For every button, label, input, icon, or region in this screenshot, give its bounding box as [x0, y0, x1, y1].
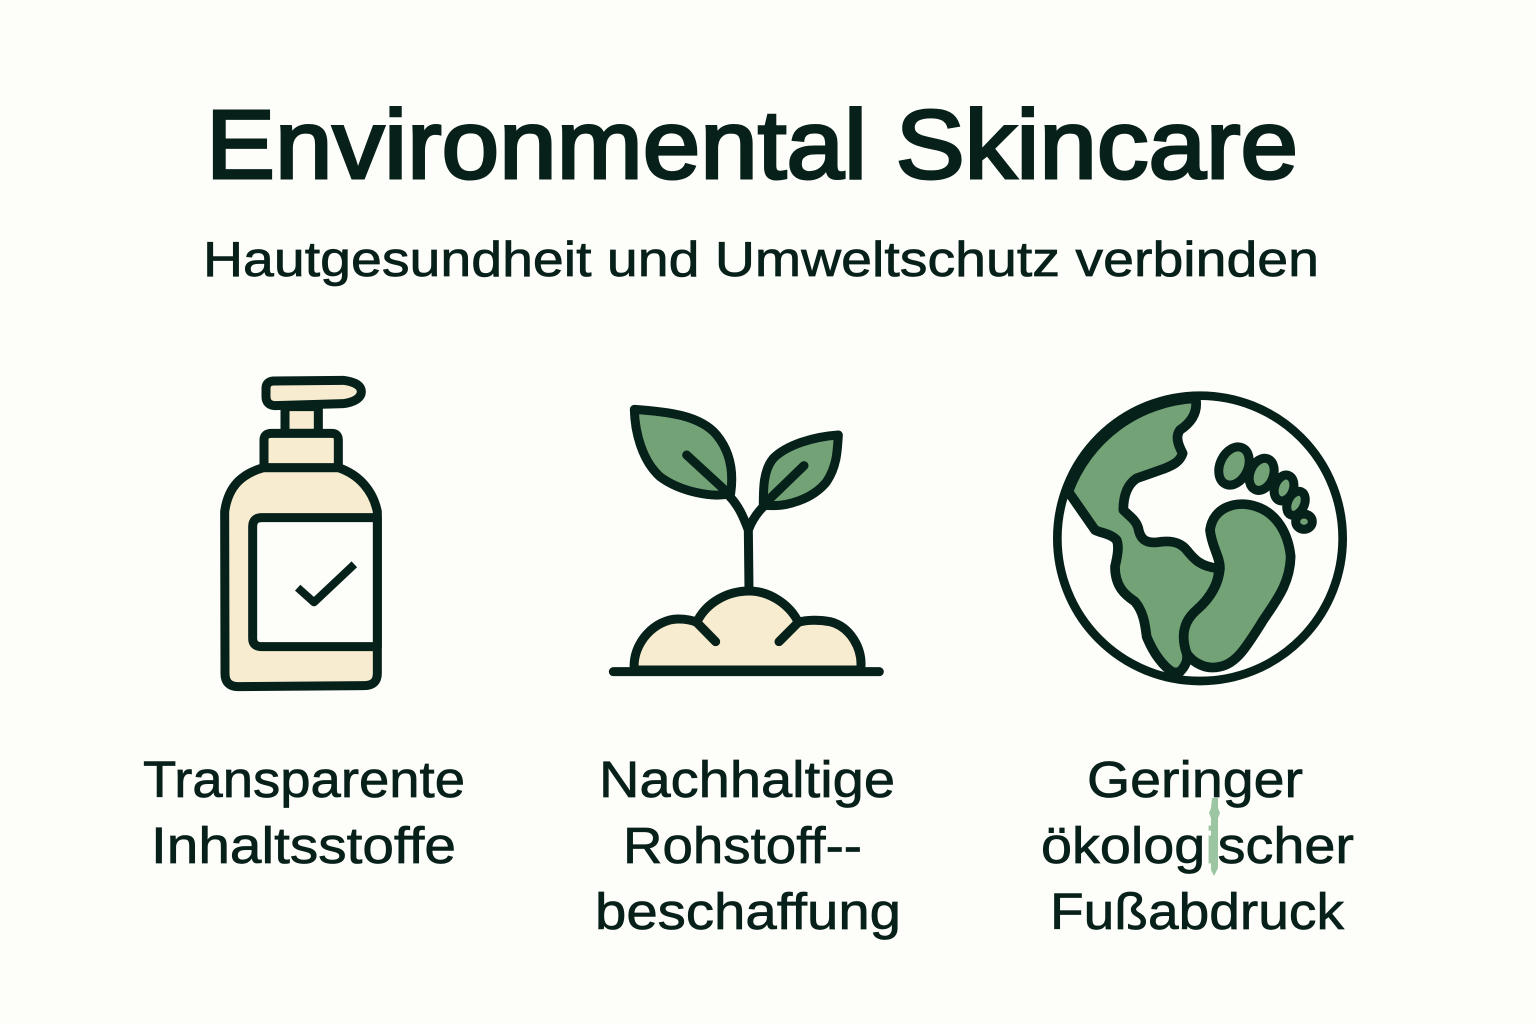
- title: Environmental Skincare: [206, 90, 1298, 199]
- icon: pump bottle with checkmark: [225, 380, 377, 687]
- label: transparent ingredients: Transparente: [143, 751, 465, 808]
- label: low ecological footprint: ökolog ischer: [1041, 817, 1354, 874]
- icon: globe with footprint: [1057, 396, 1343, 681]
- green vertical stroke over text: [1209, 798, 1220, 876]
- label: low ecological footprint: Fußabdruck: [1050, 883, 1345, 940]
- label: low ecological footprint: Geringer: [1087, 751, 1303, 808]
- subtitle: Hautgesundheit und Umweltschutz verbinden: [203, 233, 1319, 287]
- label: low ecological footprint: [1041, 751, 1354, 940]
- label: sustainable sourcing: [595, 751, 901, 940]
- label: sustainable sourcing: beschaffung: [595, 883, 901, 940]
- label: sustainable sourcing: Nachhaltige: [599, 751, 895, 808]
- label: transparent ingredients: Inhaltsstoffe: [151, 817, 456, 874]
- icon: seedling in soil: [613, 409, 879, 672]
- label: sustainable sourcing: Rohstoff--: [623, 817, 862, 874]
- label: transparent ingredients: [143, 751, 465, 874]
